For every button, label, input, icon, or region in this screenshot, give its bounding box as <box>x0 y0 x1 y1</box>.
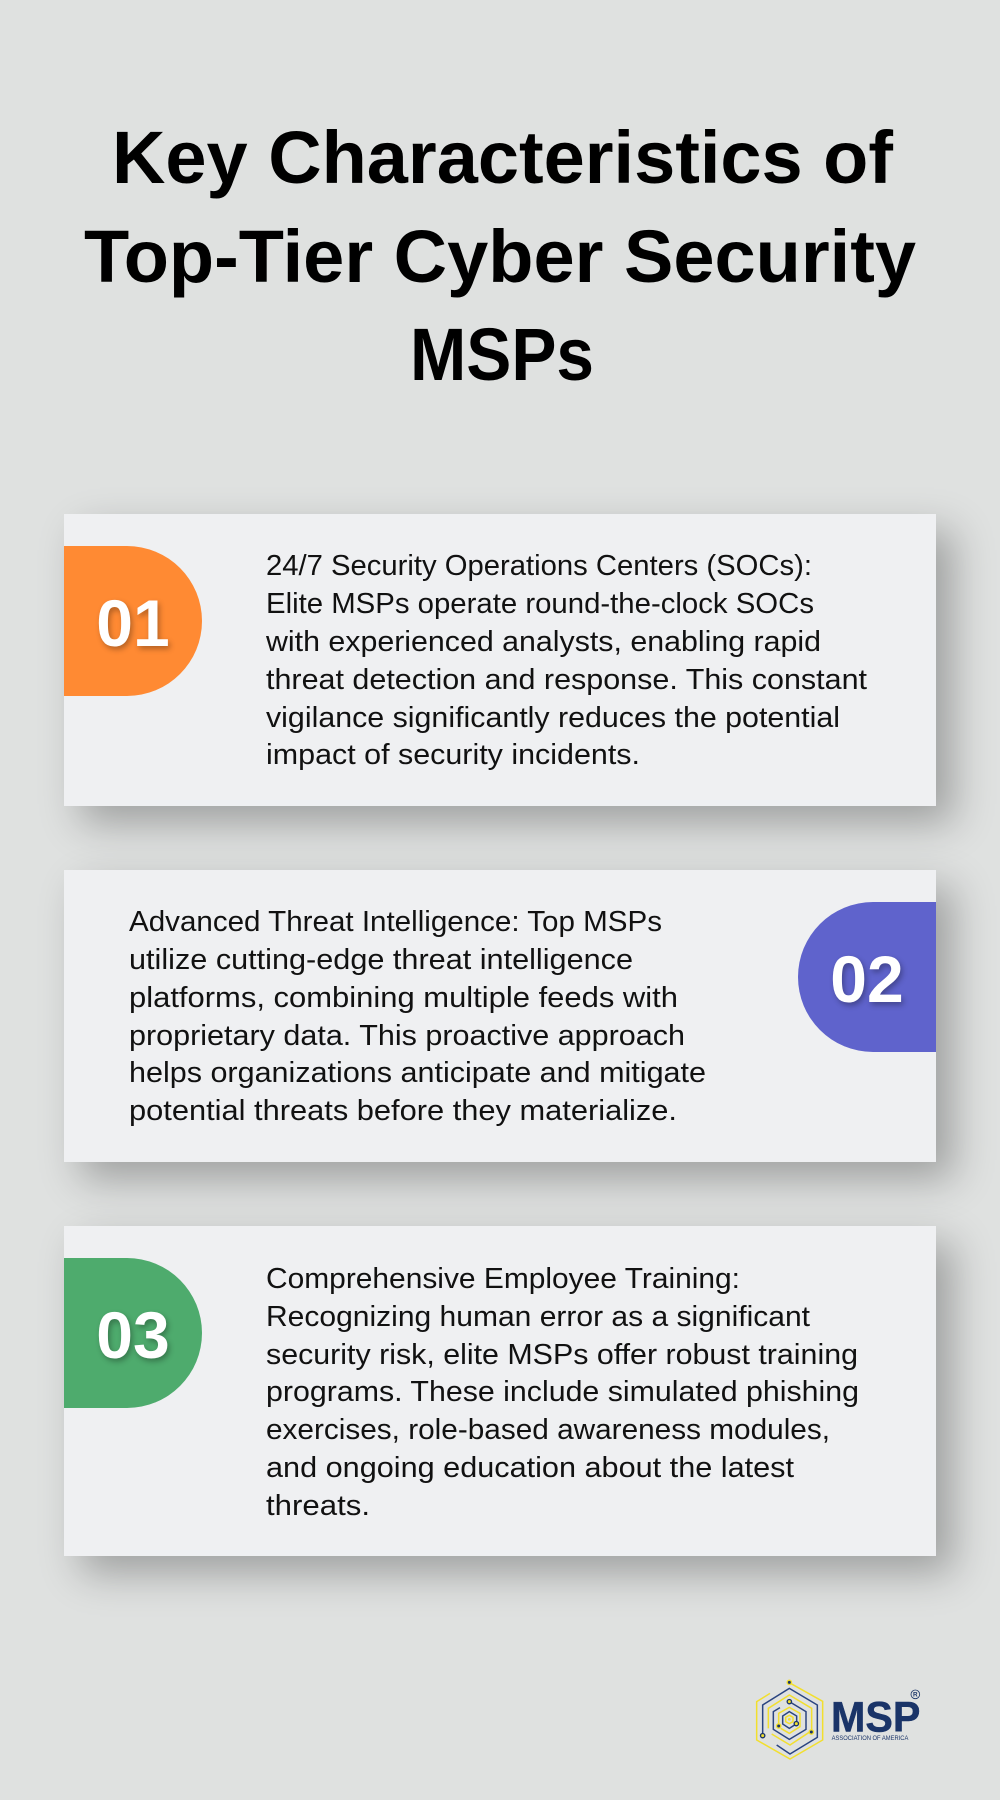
text block: Comprehensive Employee Training: programs. These include simulated phishing <box>266 1376 859 1408</box>
logo: MSP Association of America <box>756 1680 920 1760</box>
text block: 24/7 Security Operations Centers: vigilance significantly reduces the potential <box>266 702 840 734</box>
text block: Comprehensive Employee Training: Recognizing human error as a significant <box>266 1301 810 1333</box>
badge: 02 <box>798 902 936 1052</box>
text block: 24/7 Security Operations Centers <box>264 550 867 771</box>
text block: 24/7 Security Operations Centers: with experienced analysts, enabling rapid <box>264 626 820 658</box>
text block: Advanced Threat Intelligence <box>128 906 706 1127</box>
logo wordmark: MSP <box>831 1694 920 1742</box>
panel: card 01 SOCs <box>64 514 936 806</box>
text block: Comprehensive Employee Training: and ongoing education about the latest <box>266 1452 794 1484</box>
text block: Advanced Threat Intelligence: helps organizations anticipate and mitigate <box>128 1057 706 1089</box>
badge: 03 <box>64 1258 202 1408</box>
text block: Comprehensive Employee Training: Comprehensive Employee Training: <box>266 1263 740 1295</box>
text block: Comprehensive Employee Training: security risk, elite MSPs offer robust training <box>266 1339 858 1371</box>
text block: Advanced Threat Intelligence: proprietary data. This proactive approach <box>128 1020 684 1052</box>
text block: 24/7 Security Operations Centers: impact of security incidents. <box>266 739 640 771</box>
text block: Comprehensive Employee Training: exercises, role-based awareness modules, <box>266 1414 830 1446</box>
badge: 01: 01 <box>96 586 170 660</box>
badge: 02: 02 <box>830 942 904 1016</box>
title: Top-Tier Cyber Security <box>84 215 916 298</box>
text block: 24/7 Security Operations Centers: 24/7 Security Operations Centers (SOCs): <box>266 550 812 582</box>
panel: card 03 employee training <box>64 1226 936 1556</box>
text block: Advanced Threat Intelligence: utilize cutting-edge threat intelligence <box>128 944 632 976</box>
title: Key Characteristics of <box>112 116 893 199</box>
badge: 01 <box>64 546 202 696</box>
text block: Comprehensive Employee Training <box>266 1263 859 1522</box>
text block: Advanced Threat Intelligence: Advanced Threat Intelligence: Top MSPs <box>128 906 662 938</box>
text block: 24/7 Security Operations Centers: Elite MSPs operate round-the-clock SOCs <box>266 588 814 620</box>
panel: card 02 threat intelligence <box>64 870 936 1162</box>
text block: Advanced Threat Intelligence: platforms, combining multiple feeds with <box>128 982 678 1014</box>
text block: Comprehensive Employee Training: threats. <box>266 1490 370 1522</box>
logo wordmark: ASSOCIATION OF AMERICA <box>832 1735 909 1742</box>
logo wordmark: R <box>913 1692 918 1699</box>
title: MSPs <box>410 313 594 396</box>
text block: 24/7 Security Operations Centers: threat detection and response. This constant <box>266 664 867 696</box>
title <box>84 116 916 396</box>
badge: 03: 03 <box>96 1298 170 1372</box>
text block: Advanced Threat Intelligence: potential threats before they materialize. <box>128 1095 676 1127</box>
icon: circuit hexagon <box>757 1680 823 1759</box>
